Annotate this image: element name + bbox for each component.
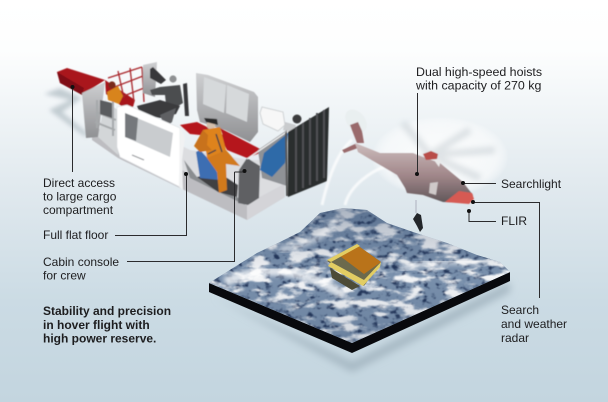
seated crew member in orange [194,118,240,193]
grey backing [258,130,287,186]
fuselage [355,143,473,203]
cabin floor side [92,127,285,220]
label: search and weather radar: Search [501,303,539,317]
tail rotor disc [341,105,371,137]
label: dual hoists: Dual high-speed hoists [416,65,542,79]
cabin console [238,158,260,205]
label: direct access: Direct access [43,176,115,190]
cabin cutaway illustration [44,62,329,220]
tail fin [342,122,364,153]
label: full flat floor: Full flat floor [43,228,108,242]
label: cabin console: for crew [43,268,86,282]
rear seat and console [150,67,189,116]
windows [429,182,438,195]
blue seat [196,150,220,180]
rail frame [95,100,116,136]
red nose [445,191,474,204]
callout: stability: Stability and precision [43,304,171,318]
crew member rear [107,81,123,104]
dark corrugated curtain [285,107,329,197]
snow surface [209,208,510,343]
upper cabin wall with windows [196,73,258,142]
red bench front [220,128,262,158]
leader lines [72,87,540,298]
round window frame [260,107,285,131]
callout: stability: in hover flight with [43,318,150,332]
spray above mountain [322,140,390,205]
mountain terrain [205,200,515,372]
rear grey wall panels [82,82,105,138]
label: direct access: compartment [43,203,114,217]
main red floor bench [180,122,260,158]
operator [137,75,183,128]
helicopter [322,105,508,205]
red rotor housing [423,151,438,160]
winch [292,114,302,124]
leader dots [70,85,475,213]
sliding door [117,105,185,190]
label: dual hoists: with capacity of 270 kg [415,78,541,92]
label: search and weather radar: radar [501,331,529,345]
red cargo bench [105,80,135,108]
rotor blur blades [395,123,495,178]
red tail section [57,68,105,95]
rescuer on hoist [413,200,423,232]
rear interior [98,100,120,155]
blue rear seat [260,133,288,177]
label: searchlight: Searchlight [501,177,562,191]
callout: stability: high power reserve. [43,332,156,346]
cargo net [108,67,144,102]
label: direct access: to large cargo [43,190,117,204]
mountain shadow [214,282,510,372]
label: cabin console: Cabin console [43,255,119,269]
label: FLIR: FLIR [501,214,527,228]
base [209,272,510,353]
dark interior under seat [184,160,245,205]
cabin shadow [44,88,90,136]
wreck box [327,244,381,290]
label: search and weather radar: and weather [501,317,567,331]
rotor disc [372,117,508,197]
